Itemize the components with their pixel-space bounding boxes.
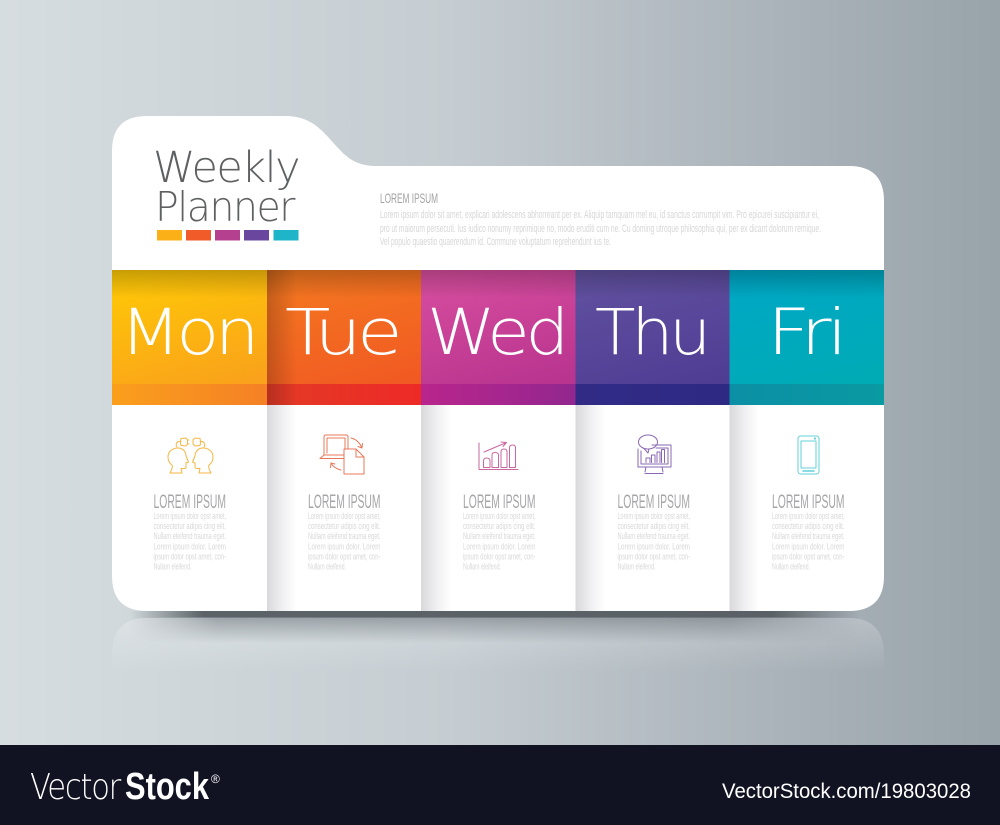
text: Thu [618,491,690,572]
day column: Tue [267,270,421,405]
text: Mon: Nullam eleifend. [154,562,192,572]
text: Wed: Nullam eleifend. [463,562,501,572]
text: Mon: LOREM IPSUM [154,491,226,513]
text: Tue: consectetur adipis cing elit. [308,521,380,531]
day labels: Fri [767,296,843,369]
day labels: Wed [427,296,565,369]
text: Thu: Nullam eleifend. [618,562,656,572]
text: Wed: Nullam eleifend trauma eget. [463,531,536,541]
text: Tue: Lorem ipsum dolor. Lorem [308,542,380,552]
text: Wed: LOREM IPSUM [463,491,536,513]
intro text block [380,190,821,248]
text: Thu: LOREM IPSUM [618,491,690,513]
text: Wed: consectetur adipis cing elit. [463,521,536,531]
text: Fri: Lorem ipsum dolor opst amet, [772,511,844,521]
title [153,144,299,231]
day column: Fri [730,270,884,405]
text: Tue: Lorem ipsum dolor opst amet, [308,511,380,521]
text: Tue [308,491,380,572]
footer logo [30,766,220,808]
footer logo: Stock [125,766,210,808]
text: Mon [154,491,226,572]
day labels: Tue [285,296,398,369]
day labels: Mon [120,296,255,369]
text: Wed [463,491,536,572]
title: Planner [155,183,296,231]
text: Thu: Nullam eleifend trauma eget. [618,531,690,541]
intro text block: Vel populo quaestio quaerendum id. Commune voluptatum reprehendunt ius te. [380,236,611,248]
day column: Thu [576,270,730,405]
text: Fri [772,491,844,572]
icon: growth bar chart [479,442,518,470]
text: Tue: ipsum dolor opst amet, con- [308,552,380,562]
title colour swatches [157,230,298,240]
text: Mon: consectetur adipis cing elit. [154,521,226,531]
text: Tue: Nullam eleifend. [308,562,346,572]
text: Fri: Nullam eleifend trauma eget. [772,531,844,541]
footer image id: VectorStock.com/19803028 [722,780,971,803]
text: Wed: Lorem ipsum dolor opst amet, [463,511,536,521]
card shadow [130,611,860,618]
text: Wed: Lorem ipsum dolor. Lorem [463,542,536,552]
text: Thu: Lorem ipsum dolor. Lorem [618,542,690,552]
day column: Wed [421,270,576,405]
day labels [120,296,843,369]
folder card [112,116,884,611]
icon: monitor with speech bubble [638,435,671,474]
text: Wed: ipsum dolor opst amet, con- [463,552,536,562]
title: Weekly [153,144,299,193]
icon: heads with plug [168,438,213,473]
text: Fri: Nullam eleifend. [772,562,810,572]
text: Thu: consectetur adipis cing elit. [618,521,690,531]
icon: laptop and document [320,435,364,474]
footer bar [0,745,1000,825]
text: Tue: LOREM IPSUM [308,491,380,513]
text: Thu: Lorem ipsum dolor opst amet, [618,511,690,521]
text: Mon: ipsum dolor opst amet, con- [154,552,226,562]
text: Fri: ipsum dolor opst amet, con- [772,552,844,562]
text: Fri: Lorem ipsum dolor. Lorem [772,542,844,552]
footer logo: Vector [30,767,121,808]
footer logo: ® [211,772,220,786]
day column: Mon [112,270,267,405]
text: Fri: LOREM IPSUM [772,491,844,513]
day labels: Thu [595,296,707,369]
text: Mon: Nullam eleifend trauma eget. [154,531,226,541]
card reflection [120,617,884,652]
icon: smartphone [798,436,819,474]
text: Thu: ipsum dolor opst amet, con- [618,552,690,562]
text: Mon: Lorem ipsum dolor. Lorem [154,542,226,552]
text: Tue: Nullam eleifend trauma eget. [308,531,380,541]
intro text block: LOREM IPSUM [380,190,438,206]
column fold shadows [267,405,760,611]
text: Mon: Lorem ipsum dolor opst amet, [154,511,226,521]
text: Fri: consectetur adipis cing elit. [772,521,844,531]
